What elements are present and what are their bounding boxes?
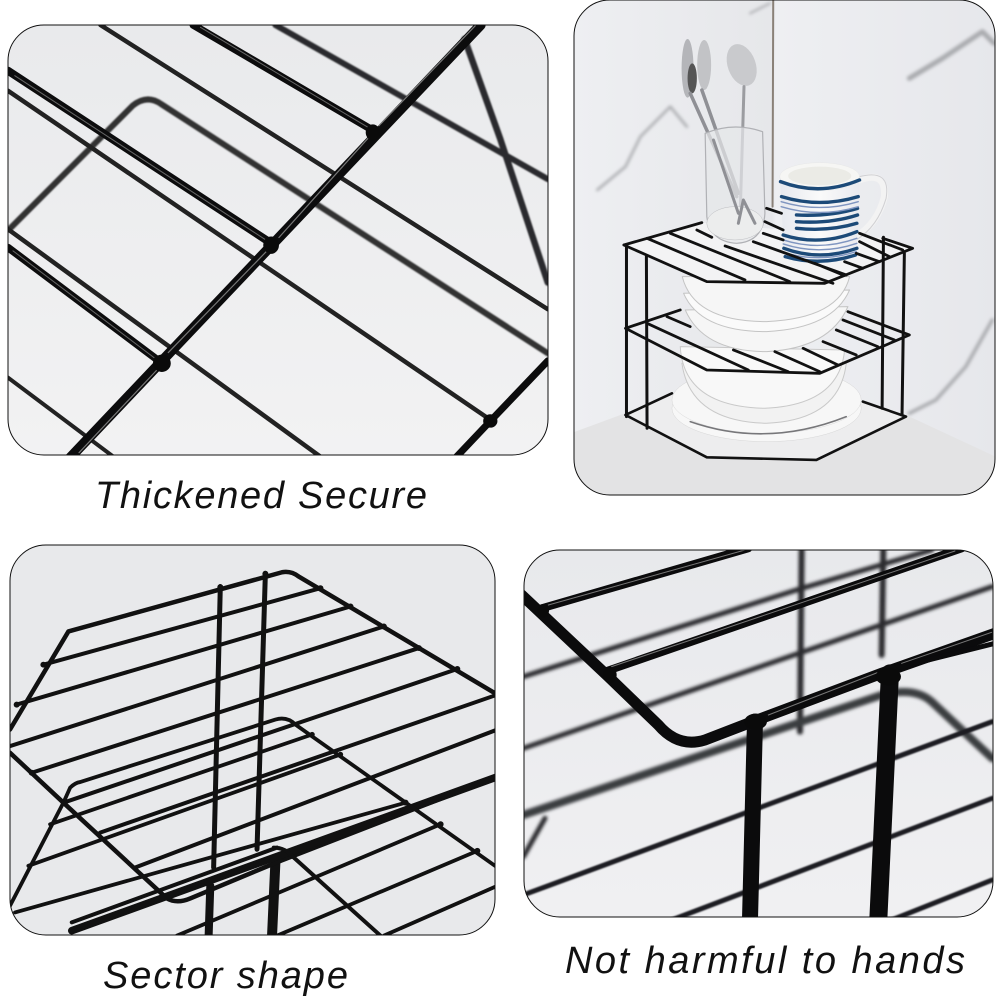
top shelf	[10, 572, 497, 901]
weld dots	[14, 571, 480, 854]
highlights	[548, 550, 992, 715]
caption: not harmful to hands: Not harmful to hands	[565, 940, 965, 982]
panel outline	[10, 545, 495, 935]
third shelf	[72, 848, 381, 936]
sharp foreground wires	[522, 548, 995, 920]
photo scene	[571, 0, 999, 500]
rack uprights	[626, 237, 904, 428]
panel: product photo in kitchen corner	[571, 0, 999, 500]
base plate	[625, 393, 906, 460]
panel: thickened wire close-up	[8, 25, 548, 458]
blurred background wires	[523, 550, 992, 857]
panel outline	[574, 0, 995, 495]
uprights	[209, 573, 275, 936]
bottom rack tier	[625, 393, 906, 460]
top tier surface	[649, 223, 908, 278]
caption: thickened secure: Thickened Secure	[95, 475, 427, 517]
spoons	[682, 39, 757, 207]
glass	[705, 127, 765, 243]
panel: smooth corner close-up	[522, 548, 995, 920]
wall corner seam	[772, 0, 774, 207]
wire shelves from above	[10, 571, 497, 936]
panel outline	[524, 550, 993, 917]
weld joints	[538, 604, 901, 730]
marble veins	[597, 3, 994, 413]
thick bar	[72, 777, 497, 931]
upper bowls	[682, 277, 850, 352]
counter floor	[574, 414, 963, 494]
panel: sector shape view	[10, 545, 497, 936]
striped mug	[780, 163, 887, 261]
second shelf	[10, 719, 497, 936]
panel outline	[8, 25, 548, 455]
top rack tier	[624, 208, 913, 283]
middle rack tier	[625, 310, 909, 373]
caption: sector shape: Sector shape	[103, 955, 348, 997]
wire rack close-up	[8, 25, 548, 458]
rounded wire close-up	[522, 548, 995, 920]
lower plates	[672, 347, 861, 442]
